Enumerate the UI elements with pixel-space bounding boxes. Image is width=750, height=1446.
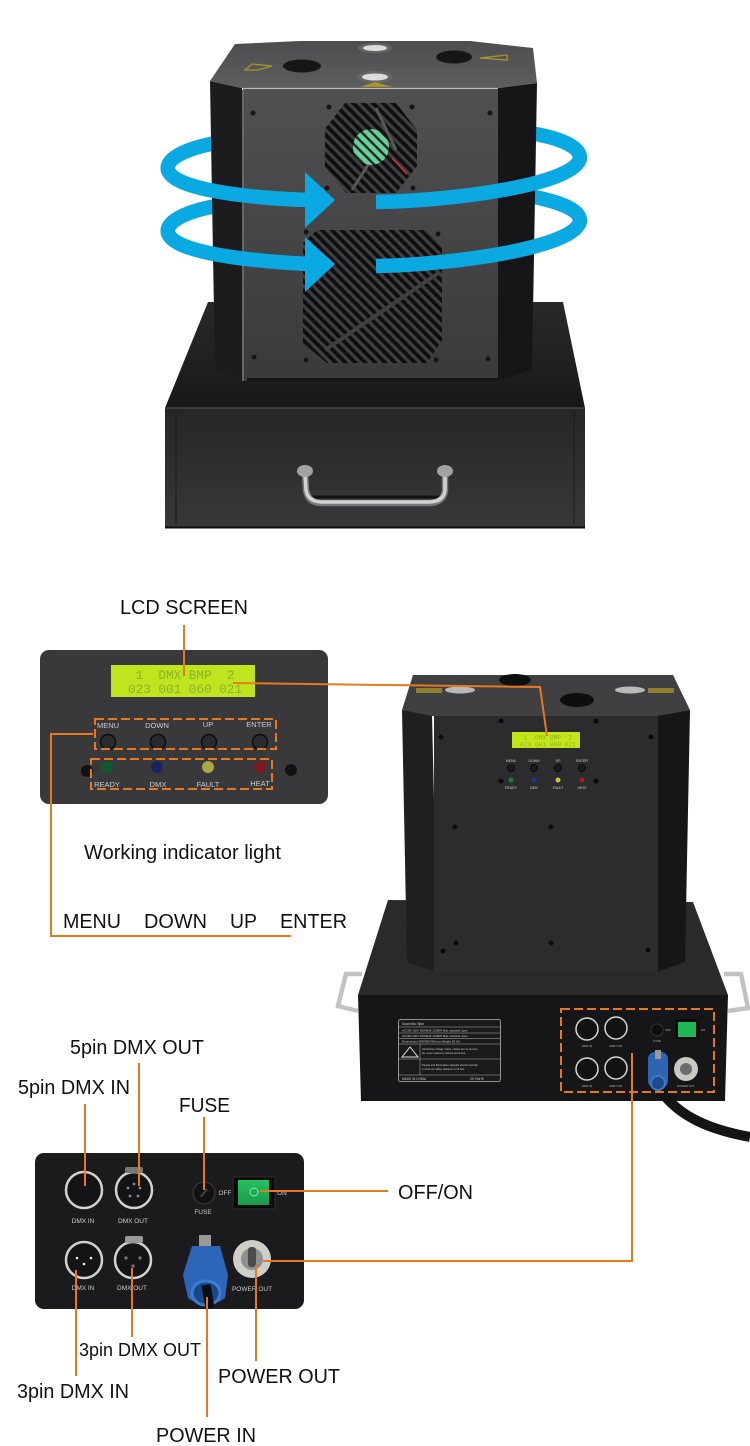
product photo: rotating laser unit on base xyxy=(161,41,587,528)
panel screws xyxy=(81,765,93,777)
connector captions: ON xyxy=(277,1190,287,1197)
label: 3pin DMX IN: 3pin DMX IN xyxy=(17,1381,129,1403)
mini controls: MENU xyxy=(506,759,517,763)
mini controls xyxy=(498,759,598,790)
spec label plate: a minimum safety distance of 15 feet. xyxy=(422,1067,465,1071)
unit screws xyxy=(438,718,654,954)
mini controls: DOWN xyxy=(528,759,540,763)
rear connectors: DMX IN xyxy=(582,1084,592,1088)
base top face xyxy=(358,900,728,995)
blue ring: upper right back segment xyxy=(530,133,580,158)
control buttons: DOWN xyxy=(145,721,169,730)
spec label plate: Scan/dia: 8pin xyxy=(402,1022,424,1026)
spec label plate: MADE IN CHINA xyxy=(402,1077,427,1081)
label: 3pin DMX OUT: 3pin DMX OUT xyxy=(79,1340,201,1360)
top knobs and rings xyxy=(245,43,507,87)
spec label plate: AC200-240V 50/60HZ 1200W Max cascade 2pcs xyxy=(402,1034,468,1038)
rear connectors: POWER OUT xyxy=(677,1084,695,1088)
mini LCD: 1 DMX BMP 2 xyxy=(520,734,576,742)
dashed highlight: indicators xyxy=(91,759,272,789)
rear connectors: DMX OUT xyxy=(610,1084,623,1088)
text: working indicator light: Working indicator light xyxy=(84,842,281,864)
dashed highlight: buttons xyxy=(95,719,276,749)
spec label plate: People and flammable materials should maintain xyxy=(422,1063,478,1067)
indicator lights xyxy=(94,761,270,789)
indicator lights: DMX xyxy=(150,780,166,789)
rear connectors: DMX IN xyxy=(582,1044,592,1048)
text: button names: UP xyxy=(230,911,257,933)
blue rotation arrow: upper ring front xyxy=(161,151,587,228)
control buttons: MENU xyxy=(97,721,119,730)
connector captions: FUSE xyxy=(194,1209,212,1216)
rocker switch xyxy=(233,1177,275,1209)
rear connectors: OFF xyxy=(665,1028,671,1032)
handle xyxy=(297,465,453,503)
fuse xyxy=(193,1182,215,1204)
blue rotation arrow: lower ring front xyxy=(161,214,587,292)
fan grill xyxy=(325,103,417,193)
base front xyxy=(358,995,728,1101)
rear connectors: ON xyxy=(701,1028,705,1032)
mini controls: FAULT xyxy=(553,786,564,790)
spec label plate: Dimensions 580*580*400mm Weight 30 KG xyxy=(402,1040,461,1044)
blue ring: lower back segment xyxy=(168,206,216,233)
label: 5pin DMX OUT: 5pin DMX OUT xyxy=(70,1037,204,1059)
blue power in connector xyxy=(183,1235,228,1308)
text: button names: ENTER xyxy=(280,911,347,933)
spec label plate: Hazardous voltage inside, please do not remove xyxy=(422,1047,478,1051)
panel: rear connector panel xyxy=(35,1153,304,1309)
connector captions: POWER OUT xyxy=(232,1286,272,1293)
text: button names: MENU xyxy=(63,911,121,933)
blue ring: lower right back segment xyxy=(530,196,580,221)
unit front xyxy=(434,716,658,973)
unit body sides xyxy=(210,81,247,381)
LCD screen xyxy=(111,665,255,697)
indicator lights: HEAT xyxy=(250,779,270,788)
label: 5pin DMX IN: 5pin DMX IN xyxy=(18,1077,130,1099)
callout lines xyxy=(51,625,632,1417)
base box front xyxy=(165,408,585,528)
control buttons: ENTER xyxy=(246,720,272,729)
XLR connectors xyxy=(66,1167,152,1278)
mini controls: ENTER xyxy=(576,759,588,763)
top details xyxy=(416,674,674,707)
heading: LCD SCREEN: LCD SCREEN xyxy=(120,597,248,619)
power cable xyxy=(660,1090,750,1137)
spec label plate xyxy=(398,1020,500,1082)
rear connectors: DMX OUT xyxy=(610,1044,623,1048)
blue ring: upper back segment xyxy=(168,143,216,170)
panel: LCD control panel xyxy=(40,650,328,804)
connector captions: DMX OUT xyxy=(117,1285,147,1292)
spec label plate: CE RoHS xyxy=(470,1077,484,1081)
control buttons xyxy=(97,720,272,750)
label: POWER OUT: POWER OUT xyxy=(218,1366,340,1388)
rear connectors xyxy=(576,1017,705,1088)
dashed highlight: rear connectors xyxy=(561,1009,714,1092)
LCD screen: 023 001 060 021 xyxy=(128,682,242,697)
mini controls: HEAT xyxy=(577,786,587,790)
control buttons: UP xyxy=(203,720,213,729)
product photo: unit rear with control panel xyxy=(338,674,750,1137)
spec label plate: AC100-120V 50/60HZ 1200W Max cascade 2pcs xyxy=(402,1028,468,1032)
LCD screen: 1 DMX BMP 2 xyxy=(128,668,242,683)
mini controls: UP xyxy=(556,759,561,763)
connector captions: DMX IN xyxy=(72,1218,95,1225)
left base handle xyxy=(338,974,362,1011)
unit top face xyxy=(402,675,690,716)
unit front panel xyxy=(243,88,498,381)
indicator lights: FAULT xyxy=(197,780,220,789)
connector captions xyxy=(72,1190,287,1293)
mini controls: DMX xyxy=(530,786,539,790)
rear connectors: FUSE xyxy=(653,1039,661,1043)
connector captions: DMX OUT xyxy=(118,1218,148,1225)
text: button names: DOWN xyxy=(144,911,207,933)
indicator lights: READY xyxy=(94,780,120,789)
mini LCD xyxy=(512,732,580,748)
text: button names xyxy=(63,911,347,933)
screws xyxy=(250,104,492,362)
connector captions: OFF xyxy=(218,1190,232,1197)
mini controls: READY xyxy=(505,786,518,790)
label: OFF/ON: OFF/ON xyxy=(398,1182,473,1204)
lower vent xyxy=(303,230,442,363)
spec label plate: the cover unless by trained personnel. xyxy=(422,1051,466,1055)
connector captions: DMX IN xyxy=(72,1285,95,1292)
mini LCD: 023 001 060 021 xyxy=(520,742,576,748)
power out connector xyxy=(233,1240,271,1278)
unit top face xyxy=(210,41,537,88)
right base handle xyxy=(724,974,748,1011)
unit sides xyxy=(402,710,438,973)
blue power connector xyxy=(648,1050,668,1090)
base box top face xyxy=(165,302,585,408)
label: FUSE: FUSE xyxy=(179,1095,230,1117)
